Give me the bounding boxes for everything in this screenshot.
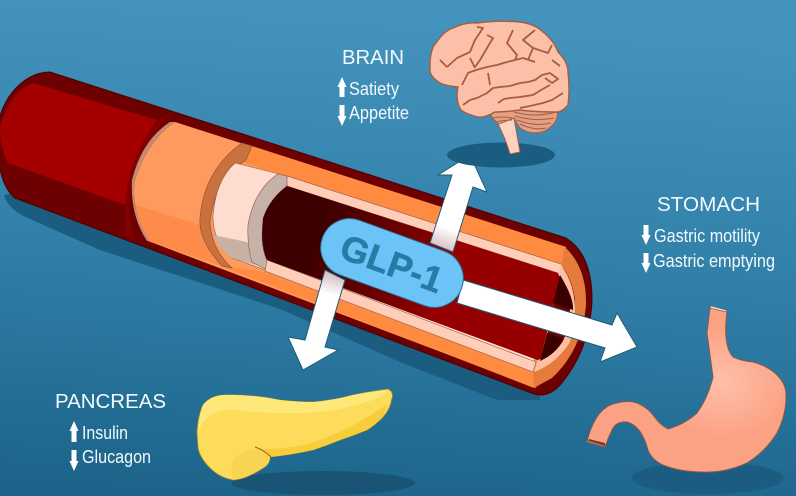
icon: up arrow satiety [338, 77, 346, 97]
heading: pancreas: PANCREAS [55, 391, 166, 413]
brain shadow [447, 142, 555, 168]
GLP-1 label pill [313, 210, 471, 316]
pancreas shadow [231, 471, 415, 495]
dark red collar [125, 113, 172, 240]
end cap pale [534, 265, 575, 372]
icon: pancreas [197, 389, 392, 480]
arrow: to stomach [457, 280, 637, 362]
arrow: to pancreas [288, 270, 345, 370]
cerebrum [430, 21, 569, 117]
icon: up arrow insulin [70, 421, 78, 442]
brainstem [498, 118, 520, 154]
blood vessel cutaway [0, 72, 592, 395]
arrow: to brain [430, 155, 487, 252]
text: satiety: Satiety [349, 78, 400, 99]
heading: brain: BRAIN [342, 47, 404, 69]
orange band upper [240, 146, 566, 266]
pancreas head shading [232, 449, 270, 480]
icon: down arrow appetite [338, 105, 346, 126]
text: appetite: Appetite [349, 102, 409, 123]
text: insulin: Insulin [82, 422, 128, 443]
pale stripes [287, 176, 564, 274]
orange band lower [210, 262, 534, 388]
end cap ring [533, 247, 586, 388]
brain folds [440, 27, 563, 108]
heading: stomach: STOMACH [657, 194, 760, 216]
icon: down arrow emptying [642, 253, 650, 273]
end cap dark opening [553, 275, 573, 310]
cerebellum [490, 110, 558, 133]
pale inner layer [213, 163, 560, 362]
text: gastric motility: Gastric motility [654, 225, 761, 246]
icon: stomach [587, 306, 786, 472]
text: gastric emptying: Gastric emptying [653, 250, 775, 271]
vessel shadow [4, 190, 540, 400]
GLP-1 label pill: GLP-1 [335, 226, 449, 301]
pancreas lower shading [258, 404, 387, 457]
brown ring [200, 143, 252, 268]
pancreas highlight [198, 390, 388, 432]
stomach shadow [632, 462, 784, 494]
icon: brain [430, 21, 569, 154]
bright red outer surface [0, 83, 157, 205]
shaded lower pale section [213, 235, 265, 268]
grey inner ring [248, 174, 287, 269]
orange layer [134, 122, 566, 388]
lumen interior [262, 186, 561, 361]
outer vessel wall [0, 72, 592, 395]
icon: down arrow glucagon [70, 450, 78, 471]
icon: down arrow motility [642, 225, 650, 245]
text: glucagon: Glucagon [82, 446, 151, 467]
